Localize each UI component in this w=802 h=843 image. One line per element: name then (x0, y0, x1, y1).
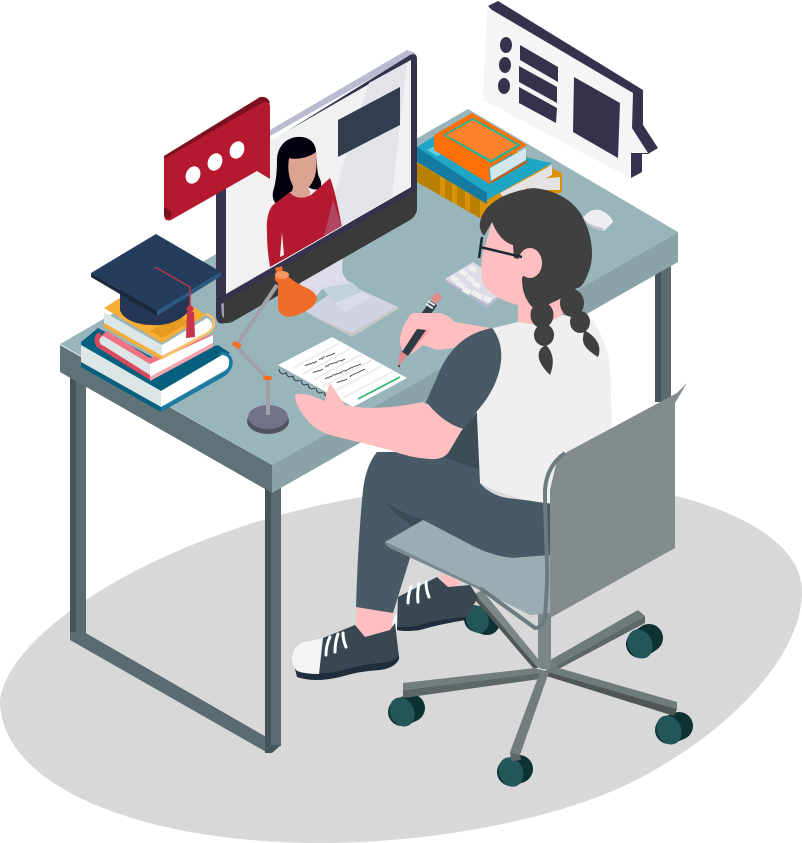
near shoe (292, 623, 399, 680)
writing hand (400, 313, 490, 355)
trousers crease shadow (386, 503, 423, 526)
chair back tube (480, 453, 565, 628)
teacher hair back (273, 137, 321, 205)
chair leg: left (403, 668, 548, 690)
caster: back (461, 601, 493, 637)
caster: lower right (652, 711, 686, 749)
ear (518, 248, 542, 278)
monitor stand (300, 258, 398, 337)
pencil lower part (398, 329, 426, 367)
braid: left (530, 302, 554, 375)
sign image block (573, 77, 620, 158)
paper spiral loops (279, 369, 330, 396)
paper green line (358, 377, 400, 399)
cap body (120, 285, 190, 325)
far shoe (392, 573, 478, 631)
caster: upper right (623, 625, 657, 663)
far shoe laces (408, 582, 429, 603)
sign dots (498, 37, 512, 94)
desk apron: right (272, 232, 678, 493)
sign panel: speech bubble with list (483, 1, 658, 178)
pencil upper part (420, 295, 440, 322)
monitor frame (216, 54, 417, 323)
chair leg: lower right (545, 666, 677, 709)
screen glare line (226, 186, 411, 294)
desk (60, 109, 678, 753)
monitor screen (226, 60, 411, 294)
lamp base (247, 405, 289, 434)
desk top (60, 109, 678, 465)
head and hair (479, 188, 599, 375)
notebook paper (278, 337, 407, 407)
book: orange (434, 113, 527, 184)
sign back (488, 1, 658, 178)
book: blue (417, 137, 552, 204)
teacher neck and face (288, 152, 317, 198)
braid: right (560, 289, 599, 357)
chair leg: back (475, 590, 543, 668)
lamp arm (236, 285, 277, 415)
book: large blue (81, 328, 233, 412)
hair mass (480, 188, 592, 307)
teacher sleeve (324, 200, 342, 236)
hand shadow (404, 329, 430, 356)
book: yellow (104, 279, 214, 360)
teacher on screen (267, 137, 342, 267)
stack of books: front left (81, 279, 233, 412)
paper handwriting (305, 353, 365, 383)
near shoe toe (292, 638, 323, 674)
chair backrest (550, 383, 687, 618)
desk lamp (232, 266, 317, 434)
book: yellow (417, 130, 562, 218)
paper ruled lines (293, 342, 392, 398)
office chair base (385, 590, 686, 790)
mouse (583, 210, 613, 231)
sign bars (519, 45, 558, 123)
lamp neck highlight (275, 271, 289, 279)
desk foot bar (70, 632, 268, 753)
cap board (91, 234, 221, 311)
caster: left (385, 693, 419, 731)
lamp shade (275, 266, 317, 317)
monitor chin (221, 190, 417, 323)
graduation cap (91, 234, 221, 338)
chair leg: upper right (545, 610, 645, 668)
trousers (356, 452, 550, 613)
bubble dots (183, 139, 247, 186)
left arm (295, 383, 463, 459)
desk apron: left (60, 345, 272, 493)
caster: front (495, 754, 527, 790)
keyboard (445, 262, 510, 308)
torso shadow (440, 412, 480, 470)
stack of books: back right (417, 113, 562, 218)
chair leg: front (510, 672, 549, 755)
desk leg: front (265, 486, 281, 753)
teacher sweater (267, 178, 342, 267)
far ankle (440, 573, 462, 590)
desk leg: back right (655, 262, 671, 402)
monitor side highlight (221, 303, 224, 318)
screen slide panel (338, 87, 400, 157)
chair column (538, 612, 551, 670)
cap tassel (155, 267, 195, 338)
chat bubble: red (164, 97, 270, 220)
lamp joints (232, 340, 272, 380)
shirt (477, 315, 612, 510)
near ankle (356, 605, 393, 638)
neck (518, 290, 563, 324)
book: pink (95, 331, 213, 381)
monitor top bevel (270, 50, 416, 136)
desk leg: left (70, 375, 86, 640)
glasses (479, 237, 522, 258)
floor shadow (0, 482, 802, 843)
sign front (483, 7, 648, 178)
near shoe laces (326, 633, 346, 655)
monitor (216, 50, 417, 323)
chair seat (385, 520, 550, 615)
sleeve (426, 328, 501, 429)
face (481, 220, 535, 305)
